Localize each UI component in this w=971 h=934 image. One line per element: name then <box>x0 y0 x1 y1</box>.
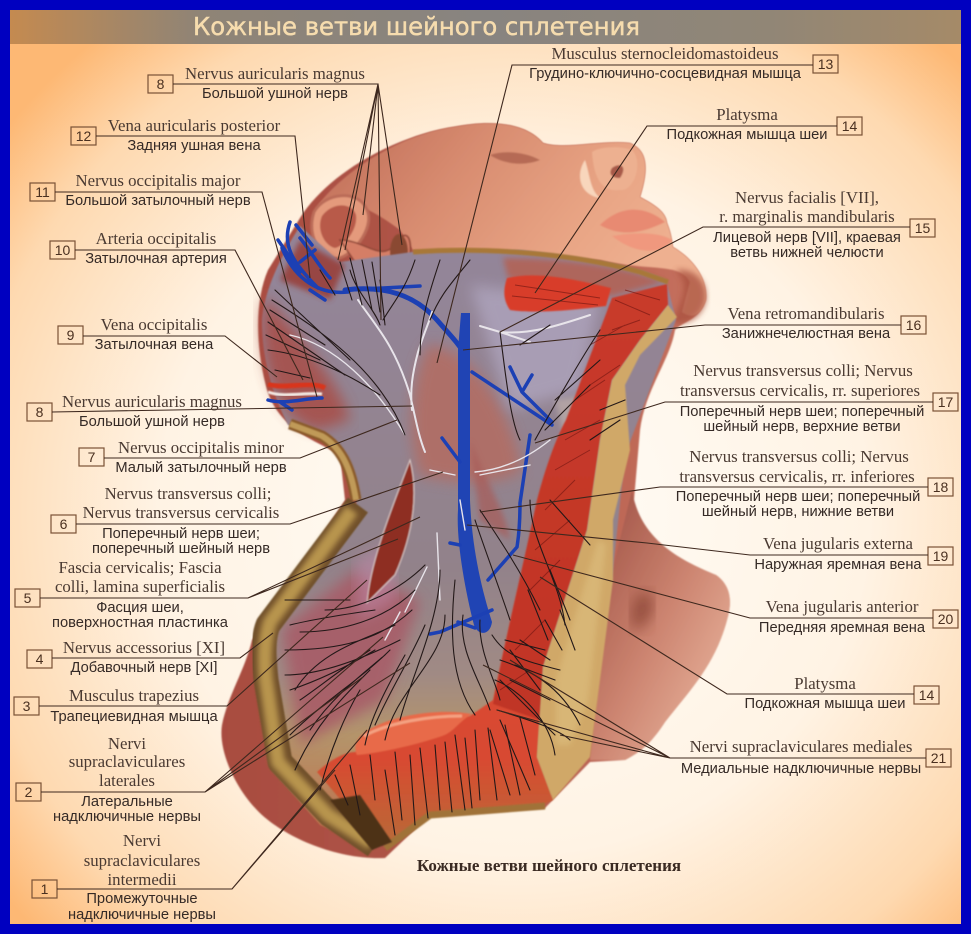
label 8: Nervus auricularis magnus (middle): Большой ушной нерв <box>79 414 225 430</box>
label 12: Vena auricularis posterior: Задняя ушная вена <box>127 138 261 154</box>
label 1: Nervi supraclaviculares intermedii: 1 <box>41 881 49 897</box>
label 9: Vena occipitalis: Затылочная вена <box>95 337 214 353</box>
label 2: Nervi supraclaviculares laterales: laterales <box>99 771 155 790</box>
label 1: Nervi supraclaviculares intermedii: надключичные нервы <box>68 907 216 923</box>
label 1: Nervi supraclaviculares intermedii: Nervi <box>123 831 161 850</box>
label 1: Nervi supraclaviculares intermedii <box>32 730 367 923</box>
label 18: rr. inferiores <box>480 447 953 520</box>
label 2: Nervi supraclaviculares laterales: надключичные нервы <box>53 809 201 825</box>
dissected fascia surface <box>258 226 676 848</box>
fat and skin cut edge <box>264 250 668 850</box>
label 5: Fascia cervicalis <box>15 517 420 631</box>
label 6: Nervus transversus colli: 6 <box>60 516 68 532</box>
label 14: Platysma (top): 14 <box>842 118 857 134</box>
label 3: Musculus trapezius: Трапециевидная мышца <box>50 709 218 725</box>
head and neck skin <box>221 123 730 858</box>
title bar: Кожные ветви шейного сплетения <box>193 12 640 41</box>
fat layer beside the neck <box>537 305 677 800</box>
label 10: Arteria occipitalis <box>50 229 303 380</box>
label 17: rr. superiores <box>535 361 958 443</box>
branch veins <box>430 367 552 634</box>
label 21: Nervi supraclaviculares mediales <box>483 660 951 777</box>
title bar <box>10 10 961 44</box>
label 11: Nervus occipitalis major: Большой затылочный нерв <box>65 193 251 209</box>
label 2: Nervi supraclaviculares laterales: Латеральные <box>81 794 173 810</box>
label 14: Platysma (lower): Подкожная мышца шеи <box>745 696 905 712</box>
label 2: Nervi supraclaviculares laterales: 2 <box>25 784 33 800</box>
label 15: Nervus facialis: Лицевой нерв [VII], краевая <box>713 230 901 246</box>
label 12: Vena auricularis posterior: 12 <box>76 128 91 144</box>
label 8: Nervus auricularis magnus (middle): 8 <box>36 404 44 420</box>
label 8: Nervus auricularis magnus (middle) <box>27 392 412 430</box>
label 5: Fascia cervicalis: Фасция шеи, <box>96 600 184 616</box>
label 4: Nervus accessorius: Добавочный нерв [XI] <box>71 660 217 676</box>
label 1: Nervi supraclaviculares intermedii: intermedii <box>108 870 177 889</box>
face <box>318 123 706 323</box>
white nerve trunks <box>290 300 590 640</box>
label 17: rr. superiores: Поперечный нерв шеи; поперечный <box>680 404 924 420</box>
label 17: rr. superiores: Nervus transversus colli; Nervus <box>693 361 913 380</box>
label 14: Platysma (lower) <box>540 577 939 712</box>
label 1: Nervi supraclaviculares intermedii: supraclaviculares <box>84 851 200 870</box>
veins <box>268 222 552 634</box>
label 19: Vena jugularis externa: Наружная яремная вена <box>754 557 922 573</box>
label 19: Vena jugularis externa: Vena jugularis externa <box>763 534 914 553</box>
label 11: Nervus occipitalis major <box>30 171 317 397</box>
retromandibular vein <box>345 289 465 355</box>
label 7: Nervus occipitalis minor: 7 <box>88 449 96 465</box>
label 6: Nervus transversus colli: поперечный шейный нерв <box>92 541 270 557</box>
label 18: rr. inferiores: transversus cervicalis, rr. inferiores <box>679 467 915 486</box>
label 10: Arteria occipitalis: Затылочная артерия <box>85 251 227 267</box>
label 4: Nervus accessorius: 4 <box>36 651 44 667</box>
label 19: Vena jugularis externa <box>467 525 953 573</box>
label 16: Vena retromandibularis: Vena retromandibularis <box>727 304 885 323</box>
label 8: Nervus auricularis magnus (top): Nervus auricularis magnus <box>185 64 365 83</box>
label 13: Musculus sternocleidomastoideus: 13 <box>818 56 833 72</box>
label 8: Nervus auricularis magnus (top): 8 <box>157 76 165 92</box>
label 7: Nervus occipitalis minor: Nervus occipitalis minor <box>118 438 284 457</box>
label 21: Nervi supraclaviculares mediales: 21 <box>931 750 946 766</box>
label 5: Fascia cervicalis: colli, lamina superficialis <box>55 577 225 596</box>
external jugular vein <box>458 313 492 633</box>
label 12: Vena auricularis posterior: Vena auricularis posterior <box>108 116 281 135</box>
label 3: Musculus trapezius <box>14 580 367 725</box>
label 6: Nervus transversus colli: Nervus transversus colli; <box>105 484 271 503</box>
label 15: Nervus facialis: ветвь нижней челюсти <box>730 245 884 261</box>
label 18: rr. inferiores: 18 <box>933 479 948 495</box>
label 7: Nervus occipitalis minor: Малый затылочный нерв <box>115 460 287 476</box>
occipital artery <box>268 384 325 395</box>
label 12: Vena auricularis posterior <box>71 116 310 278</box>
label 13: Musculus sternocleidomastoideus: Грудино-ключично-сосцевидная мышца <box>529 66 802 82</box>
label 8: Nervus auricularis magnus (middle): Nervus auricularis magnus <box>62 392 242 411</box>
label 4: Nervus accessorius: Nervus accessorius [XI] <box>63 638 225 657</box>
label 13: Musculus sternocleidomastoideus: Musculus sternocleidomastoideus <box>552 44 778 63</box>
label 1: Nervi supraclaviculares intermedii: Промежуточные <box>86 891 198 907</box>
label 5: Fascia cervicalis: поверхностная пластинка <box>52 615 229 631</box>
label 16: Vena retromandibularis <box>463 304 926 350</box>
label 18: rr. inferiores: Nervus transversus colli; Nervus <box>689 447 909 466</box>
label 18: rr. inferiores: шейный нерв, нижние ветви <box>702 504 894 520</box>
label 17: rr. superiores: 17 <box>938 394 953 410</box>
label 9: Vena occipitalis: 9 <box>67 327 75 343</box>
label 6: Nervus transversus colli: Nervus transversus cervicalis <box>83 503 279 522</box>
label 21: Nervi supraclaviculares mediales: Медиальные надключичные нервы <box>681 761 921 777</box>
label 20: Vena jugularis anterior: 20 <box>938 611 953 627</box>
label 15: Nervus facialis: r. marginalis mandibularis <box>719 207 895 226</box>
label 16: Vena retromandibularis: Занижнечелюстная вена <box>722 326 891 342</box>
label 14: Platysma (lower): Platysma <box>794 674 856 693</box>
fine nerve branches <box>266 258 625 835</box>
label 5: Fascia cervicalis: Fascia cervicalis; Fascia <box>58 558 222 577</box>
label 3: Musculus trapezius: 3 <box>23 698 31 714</box>
figure caption: Кожные ветви шейного сплетения <box>417 856 681 875</box>
label 8: Nervus auricularis magnus (top) <box>148 64 402 320</box>
label 17: rr. superiores: transversus cervicalis, rr. superiores <box>680 381 920 400</box>
label 10: Arteria occipitalis: Arteria occipitalis <box>96 229 216 248</box>
label 15: Nervus facialis: Nervus facialis [VII], <box>735 188 879 207</box>
label 6: Nervus transversus colli: Поперечный нерв шеи; <box>102 526 260 542</box>
occipital veins <box>268 222 420 410</box>
label 2: Nervi supraclaviculares laterales: Nervi <box>108 734 146 753</box>
label 19: Vena jugularis externa: 19 <box>933 548 948 564</box>
label 7: Nervus occipitalis minor <box>79 420 397 476</box>
label 15: Nervus facialis <box>500 188 935 332</box>
label 5: Fascia cervicalis: 5 <box>24 590 32 606</box>
label 3: Musculus trapezius: Musculus trapezius <box>69 686 199 705</box>
label 14: Platysma (top) <box>535 105 862 293</box>
muscle striations <box>500 285 660 690</box>
platysma muscle <box>317 275 668 844</box>
label 20: Vena jugularis anterior <box>513 555 958 636</box>
label 11: Nervus occipitalis major: Nervus occipitalis major <box>76 171 241 190</box>
label 10: Arteria occipitalis: 10 <box>55 242 70 258</box>
label 9: Vena occipitalis: Vena occipitalis <box>101 315 207 334</box>
label 20: Vena jugularis anterior: Передняя яремная вена <box>759 620 926 636</box>
anatomical illustration of the neck <box>221 123 730 858</box>
label 6: Nervus transversus colli <box>51 472 443 557</box>
ear <box>312 196 410 270</box>
label 2: Nervi supraclaviculares laterales <box>16 637 410 825</box>
label 14: Platysma (top): Platysma <box>716 105 778 124</box>
label 8: Nervus auricularis magnus (top): Большой ушной нерв <box>202 86 348 102</box>
label 9: Vena occipitalis <box>58 315 277 377</box>
label 13: Musculus sternocleidomastoideus <box>437 44 838 363</box>
label 21: Nervi supraclaviculares mediales: Nervi supraclaviculares mediales <box>690 737 912 756</box>
label 14: Platysma (lower): 14 <box>919 687 934 703</box>
label 18: rr. inferiores: Поперечный нерв шеи; поперечный <box>676 489 920 505</box>
label 11: Nervus occipitalis major: 11 <box>35 184 50 200</box>
label 4: Nervus accessorius <box>27 633 273 676</box>
label 20: Vena jugularis anterior: Vena jugularis anterior <box>766 597 919 616</box>
label 2: Nervi supraclaviculares laterales: supraclaviculares <box>69 752 185 771</box>
label 17: rr. superiores: шейный нерв, верхние ветви <box>703 419 901 435</box>
label 15: Nervus facialis: 15 <box>915 220 930 236</box>
label 16: Vena retromandibularis: 16 <box>906 317 921 333</box>
label 14: Platysma (top): Подкожная мышца шеи <box>667 127 827 143</box>
